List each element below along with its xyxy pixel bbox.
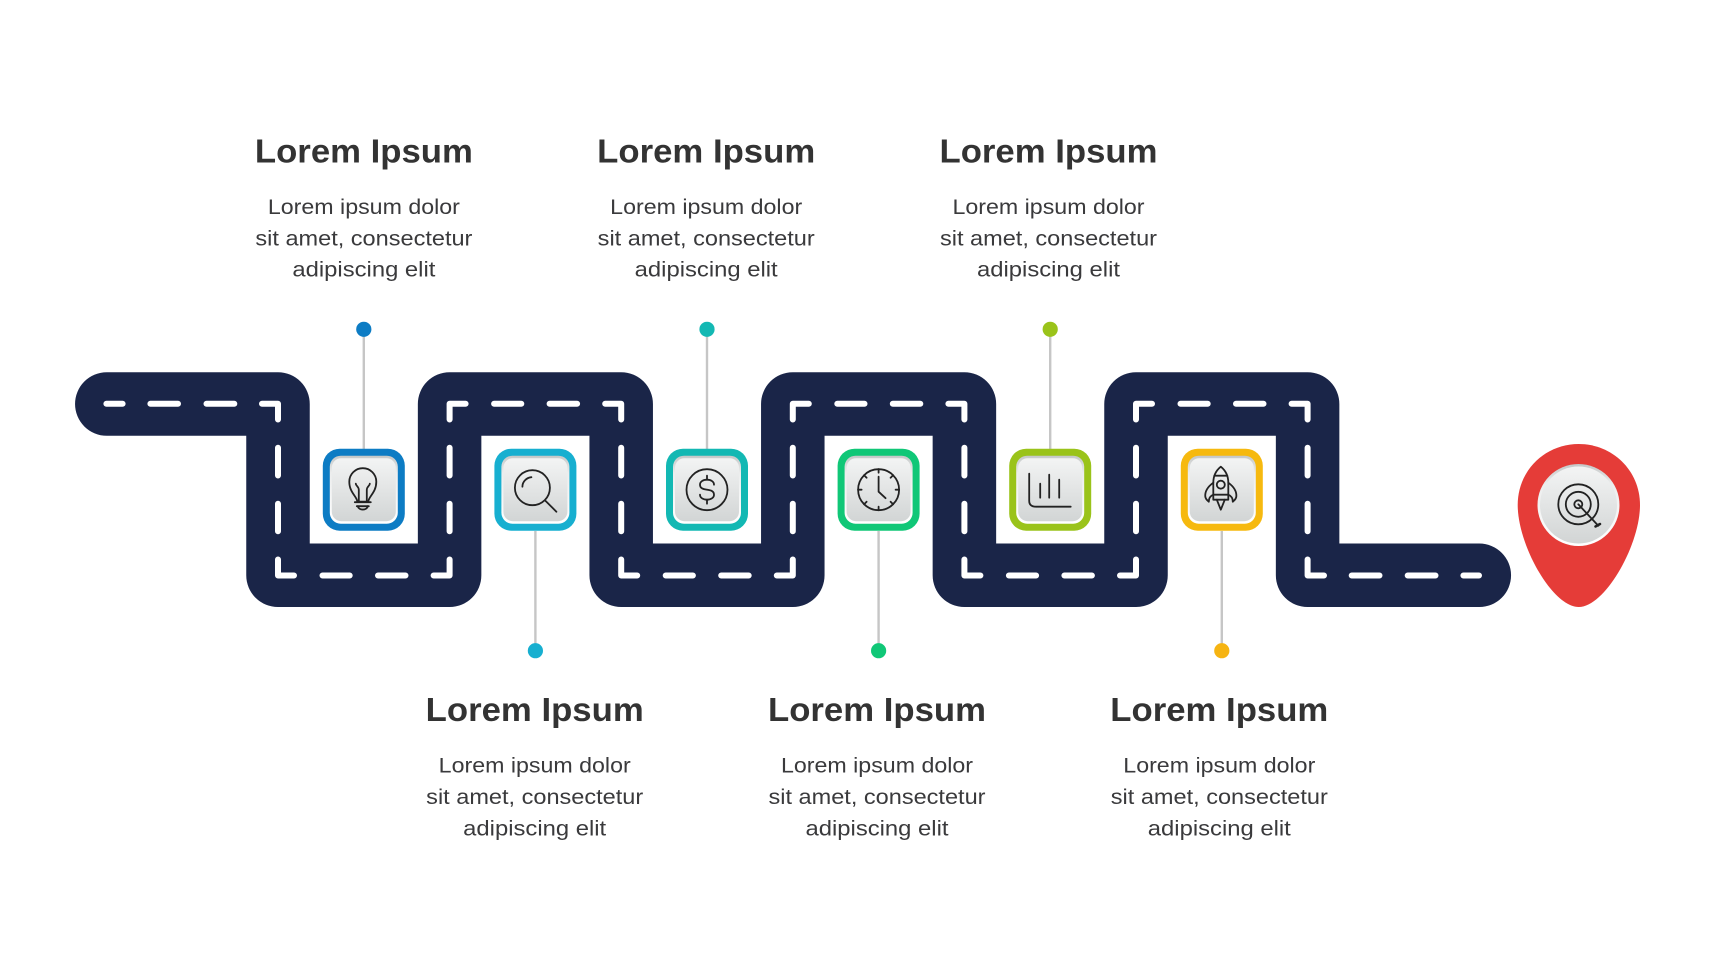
heading 6: Lorem Ipsum bbox=[1110, 691, 1328, 728]
body 5: adipiscing elit bbox=[977, 259, 1120, 282]
heading 5: Lorem Ipsum bbox=[940, 132, 1158, 169]
body 5: sit amet, consectetur bbox=[940, 228, 1157, 251]
text block 2 bbox=[426, 691, 644, 840]
body 2: sit amet, consectetur bbox=[426, 786, 643, 809]
body 4: sit amet, consectetur bbox=[768, 786, 986, 809]
body 6: Lorem ipsum dolor bbox=[1123, 755, 1315, 778]
winding road bbox=[107, 404, 1479, 575]
body 2: adipiscing elit bbox=[463, 817, 606, 840]
body 1 bbox=[255, 196, 472, 282]
text block 4 bbox=[768, 691, 986, 840]
icon box 5: bar chart bbox=[1009, 449, 1091, 531]
heading 1: Lorem Ipsum bbox=[255, 132, 473, 169]
body 4: adipiscing elit bbox=[806, 817, 949, 840]
icon box 6: rocket bbox=[1181, 449, 1263, 531]
heading 3: Lorem Ipsum bbox=[597, 132, 815, 169]
body 3 bbox=[598, 196, 815, 282]
icon box 1: light bulb bbox=[323, 449, 405, 531]
text block 6 bbox=[1110, 691, 1328, 840]
body 6 bbox=[1111, 755, 1328, 840]
icon box 3: dollar coin bbox=[666, 449, 748, 531]
body 6: adipiscing elit bbox=[1148, 817, 1291, 840]
body 2: Lorem ipsum dolor bbox=[439, 755, 631, 778]
icon box 4: clock bbox=[838, 449, 920, 531]
body 2 bbox=[426, 755, 643, 840]
body 3: adipiscing elit bbox=[635, 259, 778, 282]
body 3: sit amet, consectetur bbox=[598, 228, 815, 251]
body 5 bbox=[940, 196, 1157, 282]
body 4 bbox=[768, 755, 986, 840]
text block 1 bbox=[255, 132, 473, 282]
destination pin with target icon bbox=[1518, 444, 1640, 607]
road centre dashes bbox=[106, 404, 1479, 576]
body 6: sit amet, consectetur bbox=[1111, 786, 1328, 809]
heading 2: Lorem Ipsum bbox=[426, 691, 644, 728]
body 3: Lorem ipsum dolor bbox=[610, 196, 802, 219]
body 1: Lorem ipsum dolor bbox=[268, 196, 460, 219]
body 5: Lorem ipsum dolor bbox=[952, 196, 1145, 219]
heading 4: Lorem Ipsum bbox=[768, 691, 986, 728]
body 1: adipiscing elit bbox=[292, 259, 436, 282]
body 1: sit amet, consectetur bbox=[255, 228, 472, 251]
body 4: Lorem ipsum dolor bbox=[781, 755, 973, 778]
connector lines and dots bbox=[356, 322, 1229, 658]
text block 3 bbox=[597, 132, 815, 282]
icon box 2: magnifier bbox=[494, 449, 576, 531]
text block 5 bbox=[940, 132, 1158, 282]
